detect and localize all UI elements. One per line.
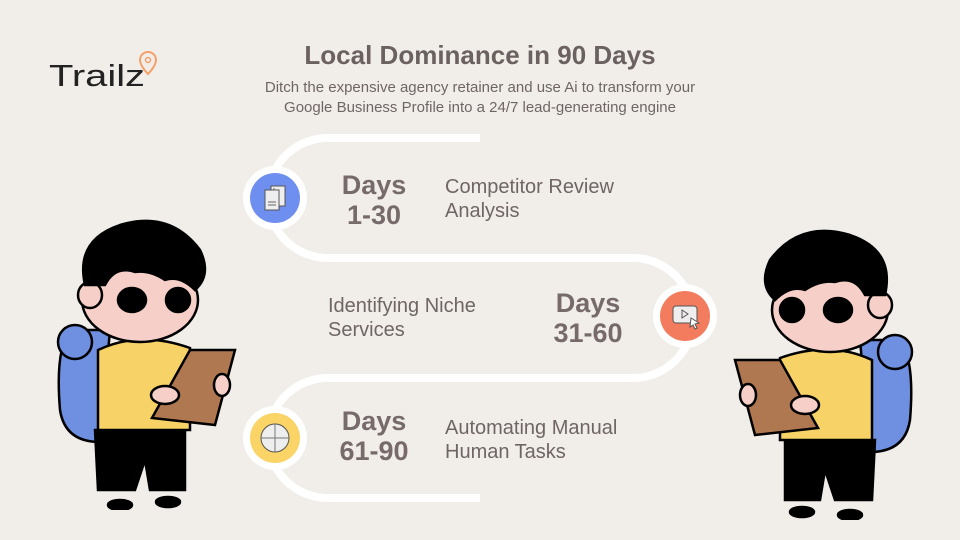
title: Local Dominance in 90 Days	[304, 40, 656, 70]
text: automating: Automating Manual	[445, 417, 617, 439]
text: competitor review: Competitor Review	[445, 176, 614, 198]
days 31-60: Days	[556, 288, 620, 318]
days 1-30: Days	[342, 170, 406, 200]
text: competitor review: Analysis	[445, 200, 519, 222]
days 61-90: 61-90	[339, 436, 409, 466]
icon: video click	[653, 284, 717, 348]
subtitle	[265, 79, 695, 116]
text: automating: Human Tasks	[445, 441, 566, 463]
logo: Trailz	[49, 58, 145, 92]
icon: documents	[243, 166, 307, 230]
days 61-90: Days	[342, 406, 406, 436]
character left	[56, 220, 237, 510]
days 31-60: 31-60	[553, 318, 623, 348]
text: competitor review	[445, 176, 614, 222]
subtitle: Ditch the expensive agency retainer and use Ai to transform your	[265, 79, 695, 96]
subtitle: Google Business Profile into a 24/7 lead-generating engine	[284, 99, 676, 116]
days 31-60	[553, 288, 623, 348]
days 61-90	[339, 406, 409, 466]
text: niche services	[328, 295, 476, 341]
text: niche services: Identifying Niche	[328, 295, 476, 317]
text: niche services: Services	[328, 319, 405, 341]
days 1-30	[342, 170, 406, 230]
character right	[733, 230, 914, 520]
days 1-30: 1-30	[347, 200, 401, 230]
logo	[49, 51, 157, 92]
text: automating	[445, 417, 617, 463]
icon: puzzle	[243, 406, 307, 470]
